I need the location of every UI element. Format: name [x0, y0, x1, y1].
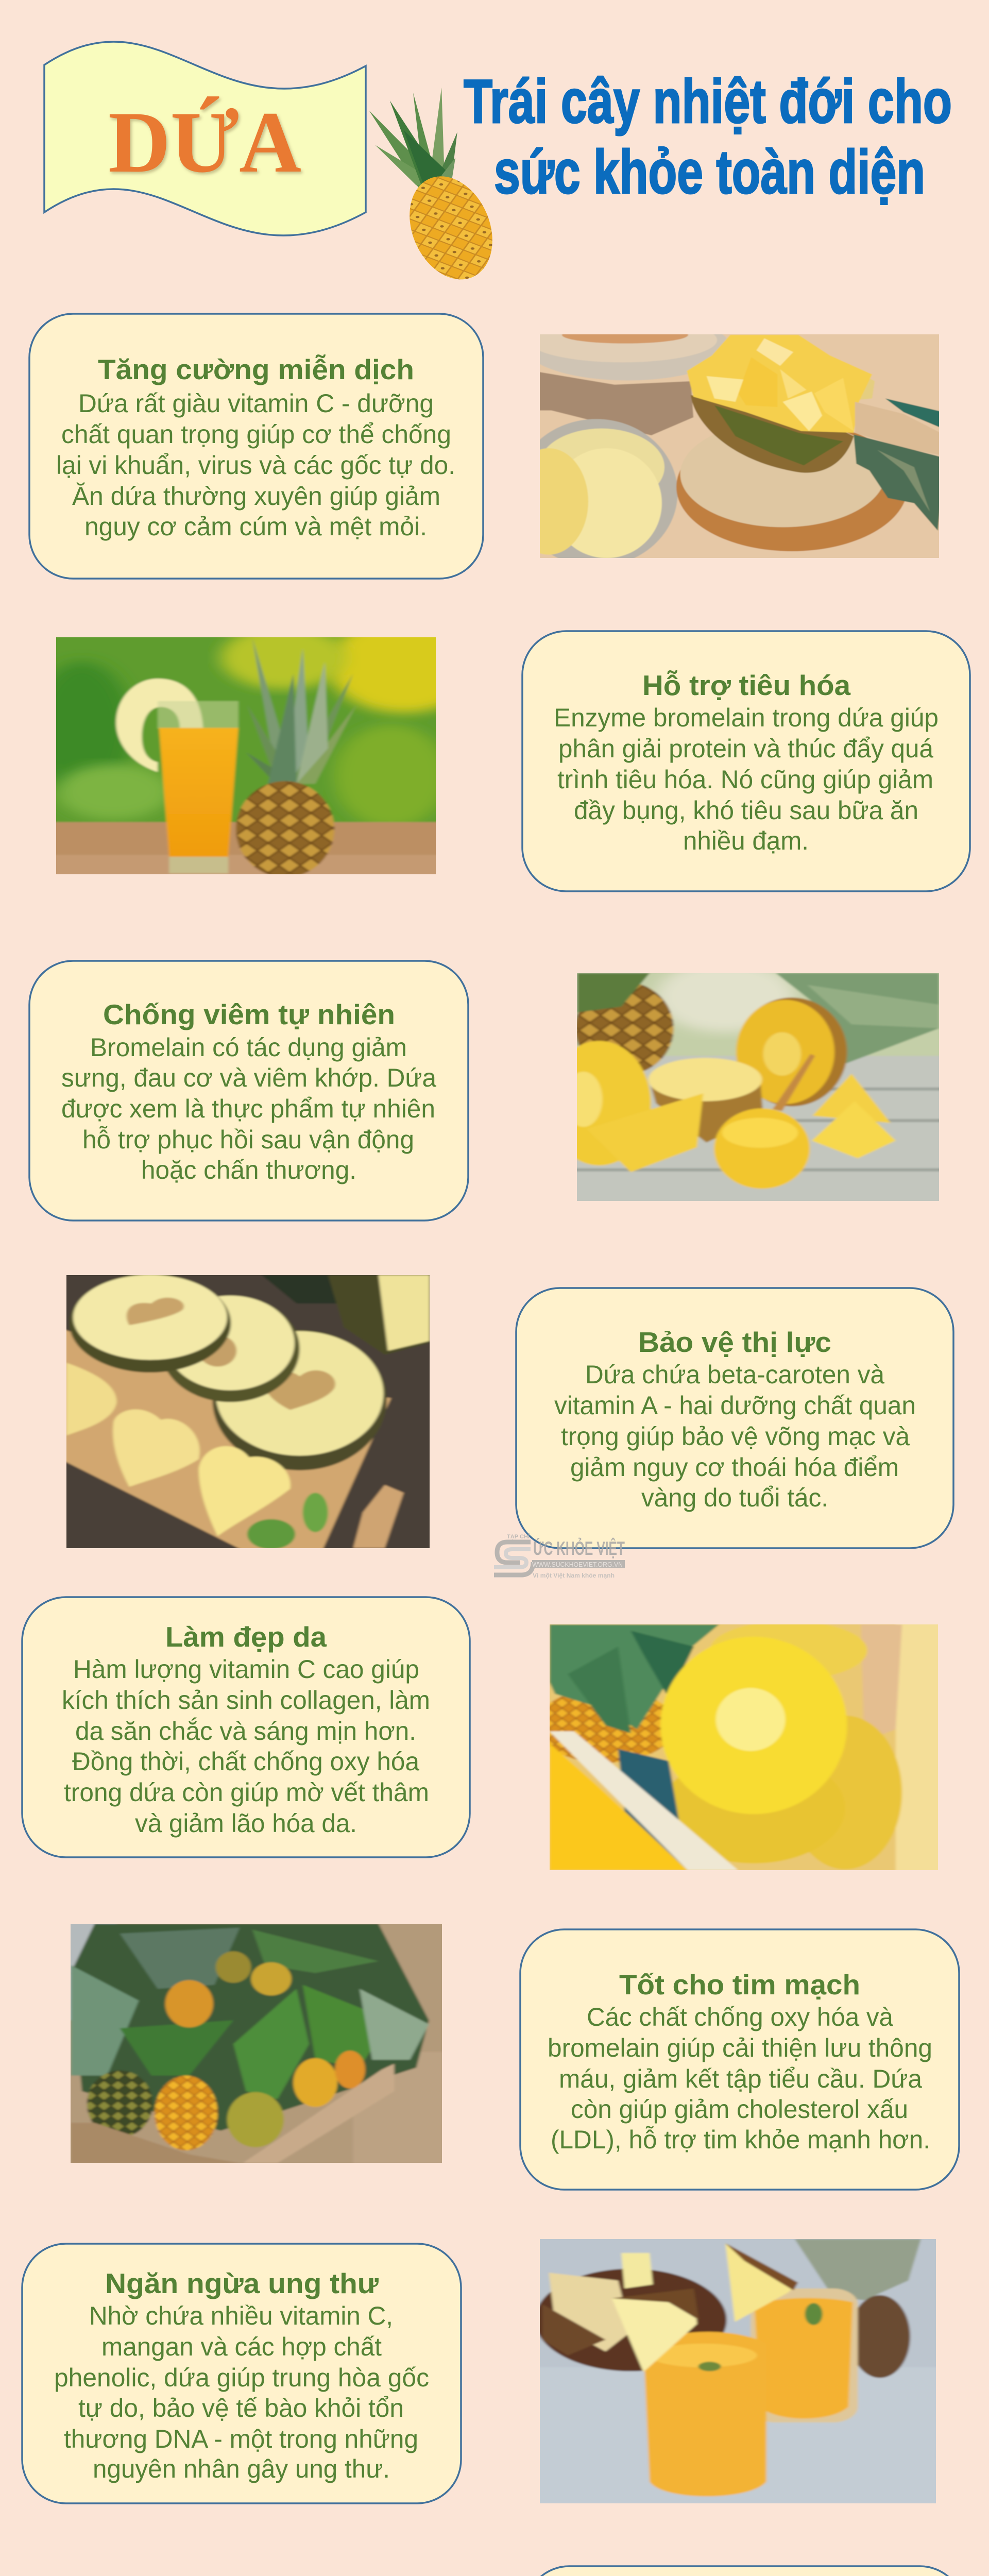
photo: crate of pineapples	[60, 1918, 454, 2170]
body text: Đồng thời, chất chống oxy hóa	[72, 1747, 419, 1776]
body text	[61, 1033, 436, 1184]
body text	[54, 2301, 429, 2483]
photo: heart-cut pineapple rings on a board	[66, 1275, 430, 1548]
body text: nguyên nhân gây ung thư.	[93, 2454, 390, 2483]
body text: Ăn dứa thường xuyên giúp giảm	[72, 482, 440, 511]
body text: hỗ trợ phục hồi sau vận động	[82, 1125, 414, 1154]
body text	[554, 703, 939, 855]
body text: bromelain giúp cải thiện lưu thông	[548, 2033, 932, 2062]
body text: phenolic, dứa giúp trung hòa gốc	[54, 2363, 429, 2392]
panel: Hỗ trợ giảm cân	[525, 2566, 964, 2576]
heading: Tăng cường miễn dịch	[98, 353, 414, 385]
body text: nhiều đạm.	[683, 826, 809, 855]
photo: two glasses of pineapple juice	[530, 2233, 946, 2509]
body text: trình tiêu hóa. Nó cũng giúp giảm	[557, 765, 933, 794]
watermark text: TẠP CHÍ	[507, 1533, 530, 1540]
body text: hoặc chấn thương.	[141, 1156, 356, 1184]
body text: trọng giúp bảo vệ võng mạc và	[561, 1422, 910, 1451]
body text: và giảm lão hóa da.	[135, 1809, 357, 1838]
panel: Tăng cường miễn dịch	[29, 314, 483, 579]
body text: da săn chắc và sáng mịn hơn.	[75, 1717, 416, 1745]
body text: giảm nguy cơ thoái hóa điểm	[570, 1453, 899, 1482]
photo: cut pineapples with jam jar	[577, 973, 939, 1201]
body text: Bromelain có tác dụng giảm	[90, 1033, 407, 1062]
panel: Bảo vệ thị lực	[516, 1288, 953, 1548]
heading: Hỗ trợ tiêu hóa	[642, 669, 850, 701]
heading: Tốt cho tim mạch	[619, 1969, 860, 2001]
body text: Các chất chống oxy hóa và	[587, 2003, 893, 2031]
icon: whole pineapple	[369, 88, 503, 283]
body text: thương DNA - một trong những	[64, 2425, 418, 2453]
watermark text: WWW.SUCKHOEVIET.ORG.VN	[532, 1561, 623, 1568]
body text: Enzyme bromelain trong dứa giúp	[554, 703, 939, 732]
body text	[548, 2003, 932, 2154]
heading: Làm đẹp da	[165, 1621, 327, 1653]
photo: pineapple juice glass	[56, 637, 436, 874]
body text: mangan và các hợp chất	[101, 2332, 382, 2361]
watermark text: Vì một Việt Nam khỏe mạnh	[533, 1572, 615, 1579]
body text: vitamin A - hai dưỡng chất quan	[554, 1391, 916, 1420]
body text	[554, 1360, 916, 1512]
body text	[62, 1655, 430, 1838]
heading: Ngăn ngừa ung thư	[105, 2267, 379, 2299]
body text: Nhờ chứa nhiều vitamin C,	[89, 2301, 393, 2330]
body text: còn giúp giảm cholesterol xấu	[571, 2095, 908, 2124]
body text: kích thích sản sinh collagen, làm	[62, 1686, 430, 1715]
watermark: Sức Khỏe Việt logo	[494, 1533, 625, 1579]
body text: được xem là thực phẩm tự nhiên	[61, 1094, 435, 1123]
body text: nguy cơ cảm cúm và mệt mỏi.	[84, 512, 427, 541]
body text: (LDL), hỗ trợ tim khỏe mạnh hơn.	[551, 2125, 930, 2154]
photo: pineapple slices on a tray	[550, 1624, 938, 1870]
watermark text: ỨC KHỎE VIỆT	[533, 1537, 625, 1559]
panel: Chống viêm tự nhiên	[29, 961, 468, 1221]
body text: trong dứa còn giúp mờ vết thâm	[64, 1778, 429, 1807]
body text: sưng, đau cơ và viêm khớp. Dứa	[61, 1063, 436, 1092]
body text	[56, 389, 455, 541]
body text: máu, giảm kết tập tiểu cầu. Dứa	[559, 2064, 922, 2093]
body text: tự do, bảo vệ tế bào khỏi tổn	[78, 2394, 404, 2422]
heading: Chống viêm tự nhiên	[103, 998, 395, 1030]
body text: Dứa rất giàu vitamin C - dưỡng	[78, 389, 434, 418]
panel: Hỗ trợ tiêu hóa	[522, 631, 970, 891]
body text: lại vi khuẩn, virus và các gốc tự do.	[56, 451, 455, 480]
body text: đầy bụng, khó tiêu sau bữa ăn	[574, 796, 918, 825]
watermark text	[507, 1533, 625, 1579]
body text: Dứa chứa beta-caroten và	[585, 1360, 884, 1389]
banner: wave with product name	[44, 42, 366, 235]
heading: Bảo vệ thị lực	[638, 1326, 831, 1358]
body text: Hàm lượng vitamin C cao giúp	[73, 1655, 419, 1684]
title	[464, 67, 952, 207]
body text: chất quan trọng giúp cơ thể chống	[61, 420, 451, 449]
body text: phân giải protein và thúc đẩy quá	[558, 734, 933, 763]
panel: Làm đẹp da	[22, 1597, 470, 1857]
banner title: DỨA	[108, 94, 301, 191]
photo: halved pineapple boat on wooden board	[540, 334, 939, 558]
panel: Tốt cho tim mạch	[520, 1929, 959, 2190]
body text: vàng do tuổi tác.	[641, 1483, 828, 1512]
panel: Ngăn ngừa ung thư	[22, 2244, 461, 2503]
